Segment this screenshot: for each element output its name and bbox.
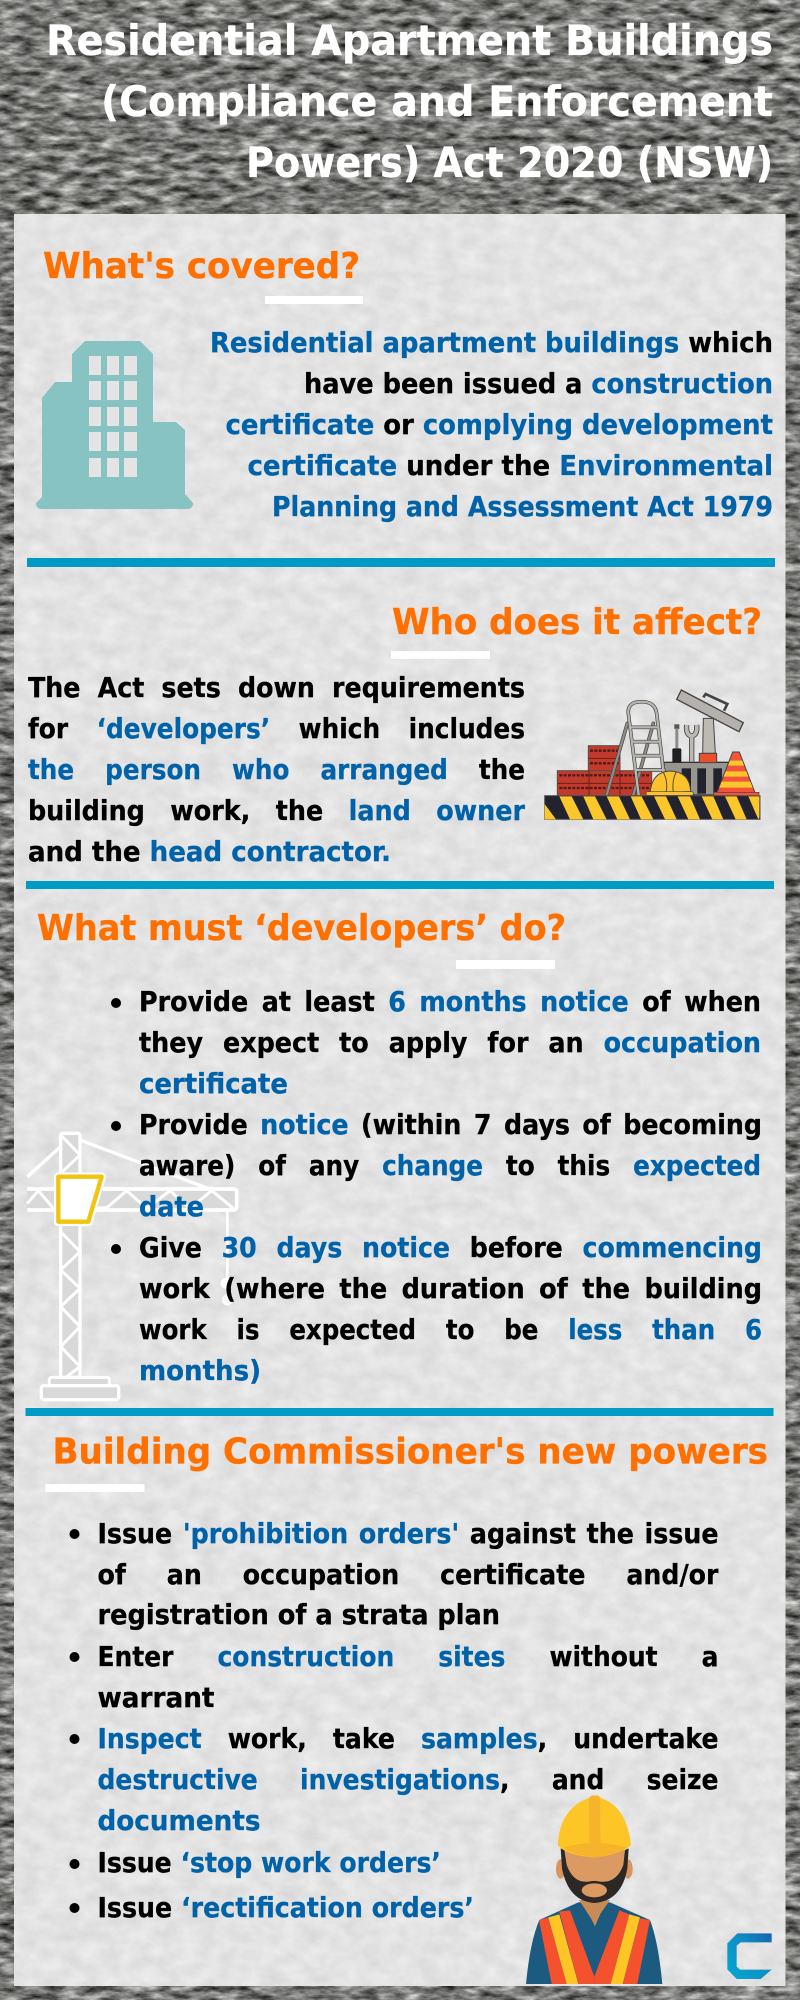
heading: building commissioner's new powers: Building Commissioner's new powers xyxy=(52,1432,768,1472)
hard hat xyxy=(558,1796,631,1858)
bullet list: commissioner powers: Issue ‘stop work orders’ xyxy=(98,1847,441,1879)
bullet list: developer obligations: work (where the duration of the building xyxy=(139,1273,762,1305)
bullet list: developer obligations: date xyxy=(139,1191,204,1223)
bullet list: commissioner powers: destructive investigations, and seize xyxy=(98,1764,718,1796)
heading: what's covered: What's covered? xyxy=(43,246,360,287)
bullet list: commissioner powers: Enter construction sites without a xyxy=(98,1641,718,1673)
worker neck xyxy=(579,1900,610,1926)
worker body xyxy=(526,1902,662,1984)
icon: tower crane xyxy=(27,1133,237,1400)
panel: what's covered xyxy=(36,246,773,523)
bullet list: developer obligations: work is expected to be less than 6 xyxy=(139,1314,762,1346)
screwdriver xyxy=(674,724,679,729)
panel: who does it affect xyxy=(28,602,762,868)
bricks xyxy=(557,746,652,796)
crane cable and hook xyxy=(223,1210,231,1300)
text block: coverage description: Residential apartment buildings which xyxy=(210,327,773,359)
bullet list: developer obligations: months) xyxy=(139,1355,261,1387)
crane stays xyxy=(27,1140,217,1192)
title: (Compliance and Enforcement xyxy=(101,77,773,126)
heading underline xyxy=(456,960,555,969)
heading underline xyxy=(265,296,363,304)
heading: who does it affect: Who does it affect? xyxy=(392,602,762,643)
icon: apartment building xyxy=(36,341,193,509)
wrench xyxy=(687,725,697,762)
icon: construction worker xyxy=(526,1796,662,1984)
bullet list: commissioner powers: Issue 'prohibition orders' against the issue xyxy=(98,1518,718,1550)
title xyxy=(46,16,773,187)
bullet list: commissioner powers: documents xyxy=(98,1805,260,1837)
text block: developers definition: the person who arranged the xyxy=(28,754,525,786)
text block: developers definition: building work, the land owner xyxy=(28,795,525,827)
crane mast xyxy=(61,1133,80,1377)
traffic cone xyxy=(717,752,755,793)
text block: coverage description: certificate under the Environmental xyxy=(248,450,773,482)
bullet list: commissioner powers: warrant xyxy=(98,1682,214,1714)
text block: developers definition: for ‘developers’ which includes xyxy=(28,713,525,745)
bullet list: commissioner powers: Inspect work, take samples, undertake xyxy=(98,1723,718,1755)
bullet list: commissioner powers xyxy=(70,1518,719,1924)
safety vest xyxy=(539,1910,650,1984)
bullet list: developer obligations xyxy=(111,986,762,1387)
bullet list: commissioner powers: of an occupation certificate and/or xyxy=(98,1559,719,1591)
bullet list: developer obligations: they expect to apply for an occupation xyxy=(139,1027,761,1059)
crane cabin xyxy=(58,1177,102,1222)
warning stripe band xyxy=(545,796,760,819)
worker head xyxy=(556,1859,565,1879)
bullet list: commissioner powers: Issue ‘rectification orders’ xyxy=(98,1892,474,1924)
bullet list: developer obligations: Provide notice (within 7 days of becoming xyxy=(139,1109,762,1141)
ladder xyxy=(607,702,664,795)
crane base xyxy=(49,1377,109,1386)
panel: what must developers do xyxy=(27,908,762,1400)
heading underline xyxy=(391,651,490,659)
bullet list: commissioner powers: registration of a strata plan xyxy=(98,1599,500,1631)
level xyxy=(677,690,743,732)
text block: coverage description: certificate or complying development xyxy=(226,409,773,441)
title: Residential Apartment Buildings xyxy=(46,16,773,65)
icon: construction tools and materials xyxy=(545,690,760,819)
bullet list: developer obligations: Provide at least 6 months notice of when xyxy=(139,986,761,1018)
storage box xyxy=(664,762,728,795)
text block: coverage description: have been issued a construction xyxy=(304,368,773,400)
text block: developers definition: and the head contractor. xyxy=(28,836,391,868)
icon: logo xyxy=(727,1933,772,1979)
text block: developers definition xyxy=(28,672,525,868)
hard hat xyxy=(650,771,691,793)
text block: coverage description xyxy=(210,327,773,523)
bullet list: developer obligations: aware) of any change to this expected xyxy=(139,1150,761,1182)
saw xyxy=(703,718,715,753)
heading underline xyxy=(46,1484,144,1492)
panel: building commissioner's new powers xyxy=(46,1432,772,1984)
bullet list: developer obligations: Give 30 days notice before commencing xyxy=(139,1232,762,1264)
heading: what must developers do: What must ‘developers’ do? xyxy=(37,908,566,949)
bullet list: developer obligations: certificate xyxy=(139,1068,288,1100)
crane jib xyxy=(27,1189,237,1210)
text block: developers definition: The Act sets down requirements xyxy=(28,672,525,704)
